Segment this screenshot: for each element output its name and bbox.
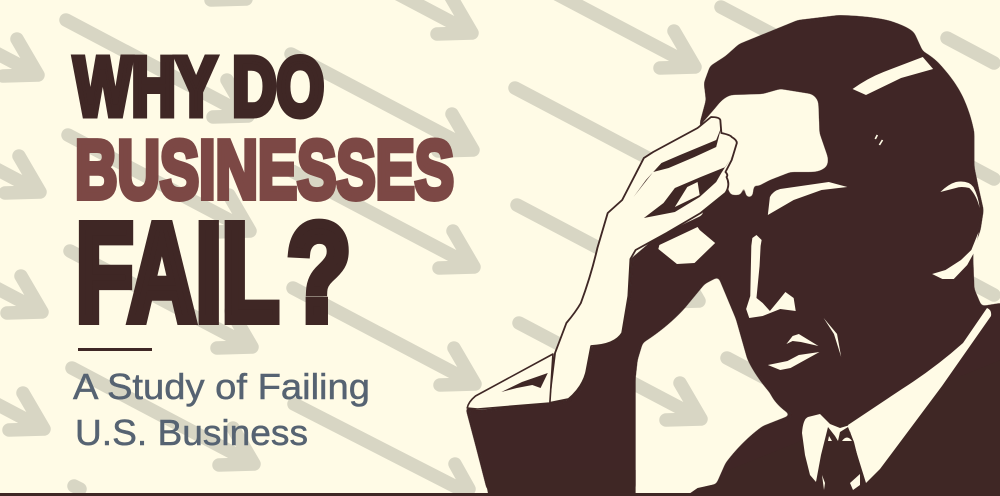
finger shadow one bbox=[634, 127, 721, 197]
nose highlight bbox=[746, 235, 796, 318]
illustration: stressed businessman bbox=[465, 15, 1000, 493]
hair highlight bbox=[853, 57, 933, 95]
cheek line bbox=[824, 318, 841, 357]
gap between fingers bbox=[675, 182, 700, 207]
cuff shadow bbox=[501, 373, 548, 392]
ear highlight upper bbox=[940, 182, 980, 208]
subtitle bbox=[73, 366, 370, 453]
shirt collar left bbox=[802, 414, 850, 482]
upper lip bbox=[786, 334, 818, 346]
finger shadow two bbox=[644, 150, 736, 218]
title: WHY DO: WHY DO bbox=[74, 40, 324, 133]
eyebrow highlight bbox=[768, 182, 847, 215]
eye glint bbox=[875, 135, 882, 145]
divider rule bbox=[78, 348, 152, 351]
bottom rule bbox=[0, 493, 1000, 496]
ear highlight lower bbox=[932, 232, 979, 279]
shirt collar right bbox=[848, 308, 991, 483]
tie and knot bbox=[816, 427, 864, 490]
subtitle: A Study of Failing bbox=[73, 366, 370, 407]
shirt cuff bbox=[467, 354, 553, 409]
forehead highlight bbox=[701, 89, 828, 197]
title: FAIL?: ? bbox=[287, 196, 351, 350]
inner palm highlight bbox=[658, 227, 715, 264]
lower lip bbox=[768, 352, 819, 370]
title: BUSINESSES: BUSINESSES bbox=[75, 123, 454, 216]
raised hand and wrist bbox=[549, 117, 737, 403]
silhouette: hair, head, suit and arm bbox=[465, 15, 1000, 490]
subtitle: U.S. Business bbox=[75, 412, 308, 453]
suit and sleeve base fill bbox=[484, 360, 1000, 493]
title: FAIL?: FAIL bbox=[76, 196, 279, 350]
tie highlights bbox=[822, 436, 860, 490]
